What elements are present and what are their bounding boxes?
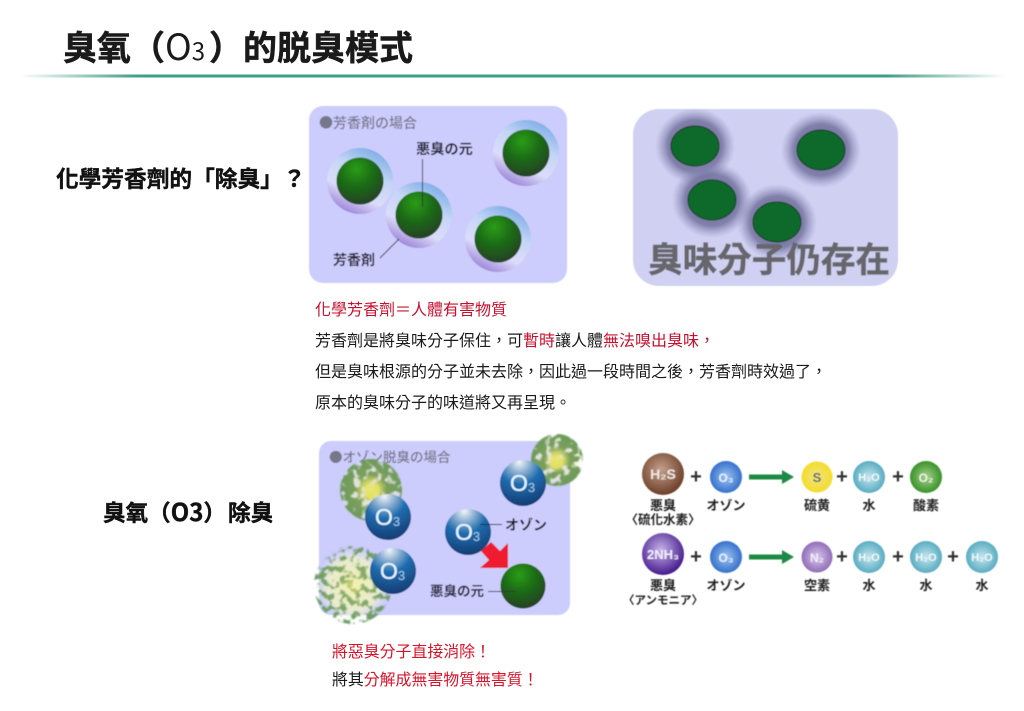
ozone molecule 1: O xyxy=(375,504,393,530)
panel background xyxy=(309,106,567,283)
H2O circle xyxy=(853,461,885,493)
label: fragrance: 芳香剤 xyxy=(333,250,375,270)
ozone molecule 3: 3 xyxy=(473,529,480,544)
heading: chemical fragrance: 化學芳香劑的「除臭」？ xyxy=(56,161,306,194)
2NH3 circle xyxy=(642,533,684,575)
title divider line xyxy=(20,74,1005,78)
O2 circle: O₂ xyxy=(919,471,933,485)
caption: odor molecules remain: 臭味分子仍存在 xyxy=(648,232,890,282)
N2 circle: N₂ xyxy=(810,551,824,565)
H2S circle xyxy=(642,453,684,495)
reaction diagrams xyxy=(623,453,998,607)
ozone molecule 2: O xyxy=(510,470,528,496)
plus: + xyxy=(892,466,904,488)
H2O circle: H₂O xyxy=(915,552,937,564)
line 4: 原本的臭味分子的味道將又再呈現。 xyxy=(315,394,571,412)
H2O circle xyxy=(966,541,998,573)
H2S circle: H₂S xyxy=(650,466,676,482)
plus: + xyxy=(836,466,848,488)
odor molecule 3 xyxy=(672,162,752,238)
labels: オゾン xyxy=(706,578,746,593)
odor molecule 1 xyxy=(655,108,735,184)
molecule 3 xyxy=(493,120,559,186)
line 1: 化學芳香劑＝人體有害物質 xyxy=(315,301,507,319)
plus: + xyxy=(892,546,904,568)
O3 circle: O₃ xyxy=(719,551,733,565)
labels xyxy=(625,498,939,527)
H2O circle: H₂O xyxy=(971,552,993,564)
labels: 〈硫化水素〉 xyxy=(625,512,701,527)
S circle: S xyxy=(813,470,822,485)
labels: 悪臭 xyxy=(650,578,676,593)
panel: odor remains diagram xyxy=(633,108,898,286)
line 2: 芳香劑是將臭味分子保住，可暫時讓人體無法嗅出臭味， xyxy=(315,331,715,350)
ozone molecule 1 xyxy=(365,494,411,540)
green arrow xyxy=(749,550,794,564)
ozone molecule 4: O xyxy=(380,558,398,584)
plus: + xyxy=(690,546,702,568)
plus: + xyxy=(836,546,848,568)
labels: 硫黄 xyxy=(804,498,830,513)
labels: 水 xyxy=(975,578,989,593)
labels: 酸素 xyxy=(913,498,939,513)
labels: オゾン xyxy=(706,498,746,513)
plus: + xyxy=(690,466,702,488)
line 1: 將惡臭分子直接消除！ xyxy=(332,643,491,661)
panel: fragrance diagram xyxy=(309,106,567,283)
labels: 水 xyxy=(862,578,876,593)
molecule 2 xyxy=(386,182,452,248)
O3 circle xyxy=(710,461,742,493)
panel caption: ●芳香剤の場合 xyxy=(319,113,417,133)
line 3: 但是臭味根源的分子並未去除，因此過一段時間之後，芳香劑時效過了， xyxy=(315,363,827,381)
odor molecule 2 xyxy=(781,112,861,188)
O3 circle xyxy=(710,541,742,573)
ozone molecule 4 xyxy=(370,548,416,594)
odor source ball xyxy=(500,564,546,608)
decomposing odor cloud top right xyxy=(530,433,584,487)
leader line: fragrance xyxy=(380,239,399,258)
leader line: odor source xyxy=(488,590,516,592)
title: 臭氧（O3）的脱臭模式 xyxy=(63,19,413,71)
H2O circle: H₂O xyxy=(858,472,880,484)
O2 circle xyxy=(910,461,942,493)
ozone molecule 2: 3 xyxy=(528,480,535,495)
H2O circle: H₂O xyxy=(858,552,880,564)
line 2: 將其分解成無害物質無害質！ xyxy=(332,671,539,689)
reaction: hydrogen sulfide xyxy=(625,453,942,527)
leader line: ozone xyxy=(480,524,502,526)
text block: ozone conclusion xyxy=(332,643,539,689)
labels: 悪臭 xyxy=(650,498,676,513)
leader line: odor source xyxy=(422,159,424,207)
labels: 水 xyxy=(862,498,876,513)
heading: ozone deodorising: 臭氧（O3）除臭 xyxy=(103,493,273,528)
reaction: ammonia xyxy=(623,533,998,607)
N2 circle xyxy=(802,542,832,572)
decomposing odor cloud top left xyxy=(338,457,404,523)
label: odor source: 悪臭の元 xyxy=(416,139,473,159)
molecule 4 xyxy=(465,206,531,272)
panel caption: ●オゾン脱臭の場合 xyxy=(329,446,451,466)
labels xyxy=(623,578,989,607)
ozone molecule 4: 3 xyxy=(398,568,405,583)
O3 circle: O₃ xyxy=(719,471,733,485)
decomposing odor cloud bottom left xyxy=(314,546,392,624)
2NH3 circle: 2NH₃ xyxy=(647,547,679,562)
H2O circle xyxy=(853,541,885,573)
panel background xyxy=(633,109,898,286)
S circle xyxy=(802,462,832,492)
ozone molecule 1: 3 xyxy=(393,514,400,529)
plus: + xyxy=(947,546,959,568)
panel background xyxy=(319,441,570,615)
label: ozone: オゾン xyxy=(505,515,547,535)
labels: 空素 xyxy=(804,578,830,593)
labels: 〈アンモニア〉 xyxy=(623,594,703,607)
odor molecule 4 xyxy=(737,184,817,260)
ozone molecule 3 xyxy=(445,509,491,555)
molecule 1 xyxy=(327,148,393,214)
green arrow xyxy=(749,470,794,484)
ozone molecule 3: O xyxy=(455,519,473,545)
H2O circle xyxy=(910,541,942,573)
red arrow xyxy=(480,542,508,568)
text block: fragrance explanation xyxy=(315,301,827,412)
label: odor source: 悪臭の元 xyxy=(430,580,484,600)
panel: ozone diagram xyxy=(314,433,584,624)
ozone molecule 2 xyxy=(500,460,546,506)
labels: 水 xyxy=(919,578,933,593)
